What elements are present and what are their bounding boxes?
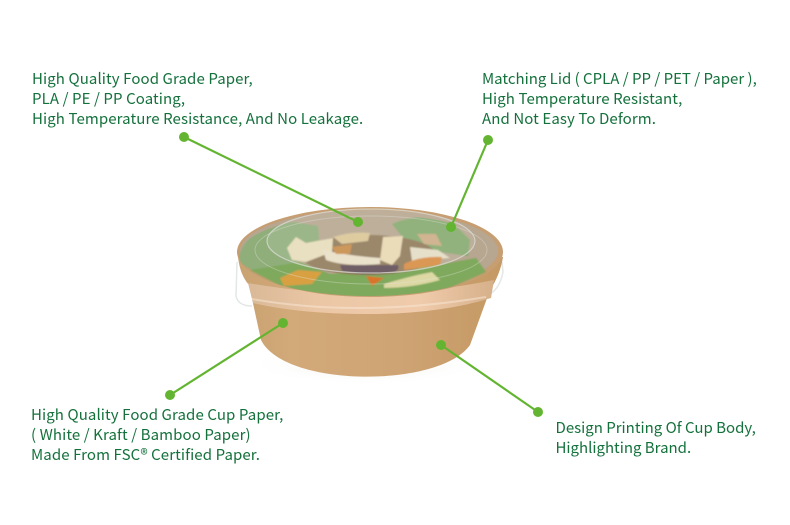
callout line: paper coating <box>179 132 363 227</box>
cream lower <box>384 272 440 288</box>
text: matching lid <box>482 68 757 129</box>
center food bed <box>300 235 436 275</box>
lid outer ring <box>255 216 487 284</box>
text: printing: Highlighting Brand. <box>556 437 691 458</box>
callout line: printing <box>436 340 543 417</box>
text: paper and coating: High Quality Food Grade Paper, <box>32 68 253 89</box>
text: printing: Design Printing Of Cup Body, <box>556 417 756 438</box>
clear lid dome <box>267 209 475 273</box>
bowl interior <box>240 210 498 292</box>
glossy lid band <box>248 280 494 314</box>
lettuce <box>238 220 320 272</box>
bowl product photo <box>236 207 503 385</box>
callout line: lid <box>446 135 493 232</box>
text: paper and coating: High Temperature Resistance, And No Leakage. <box>32 108 363 129</box>
text: printing <box>556 417 756 458</box>
text: cup paper <box>31 404 283 465</box>
rim outer <box>237 207 503 297</box>
kraft cup body <box>238 257 503 377</box>
text: cup paper: Made From FSC® Certified Paper. <box>31 444 260 465</box>
text: matching lid: High Temperature Resistant, <box>482 88 682 109</box>
callout line: cup paper <box>165 318 288 400</box>
bowl shadow <box>246 345 486 385</box>
food contents <box>238 217 486 300</box>
text: matching lid: Matching Lid ( CPLA / PP / PET / Paper ), <box>482 68 757 89</box>
text: cup paper: ( White / Kraft / Bamboo Paper) <box>31 424 251 445</box>
text: matching lid: And Not Easy To Deform. <box>482 108 656 129</box>
lid front edge shine <box>252 297 486 308</box>
dark piece <box>340 265 398 274</box>
text: paper and coating: PLA / PE / PP Coating, <box>32 88 185 109</box>
cream pieces <box>287 237 333 262</box>
text: paper and coating <box>32 68 363 129</box>
orange pieces <box>404 257 442 270</box>
lid outer tabs <box>236 262 503 306</box>
text: cup paper: High Quality Food Grade Cup Paper, <box>31 404 283 425</box>
